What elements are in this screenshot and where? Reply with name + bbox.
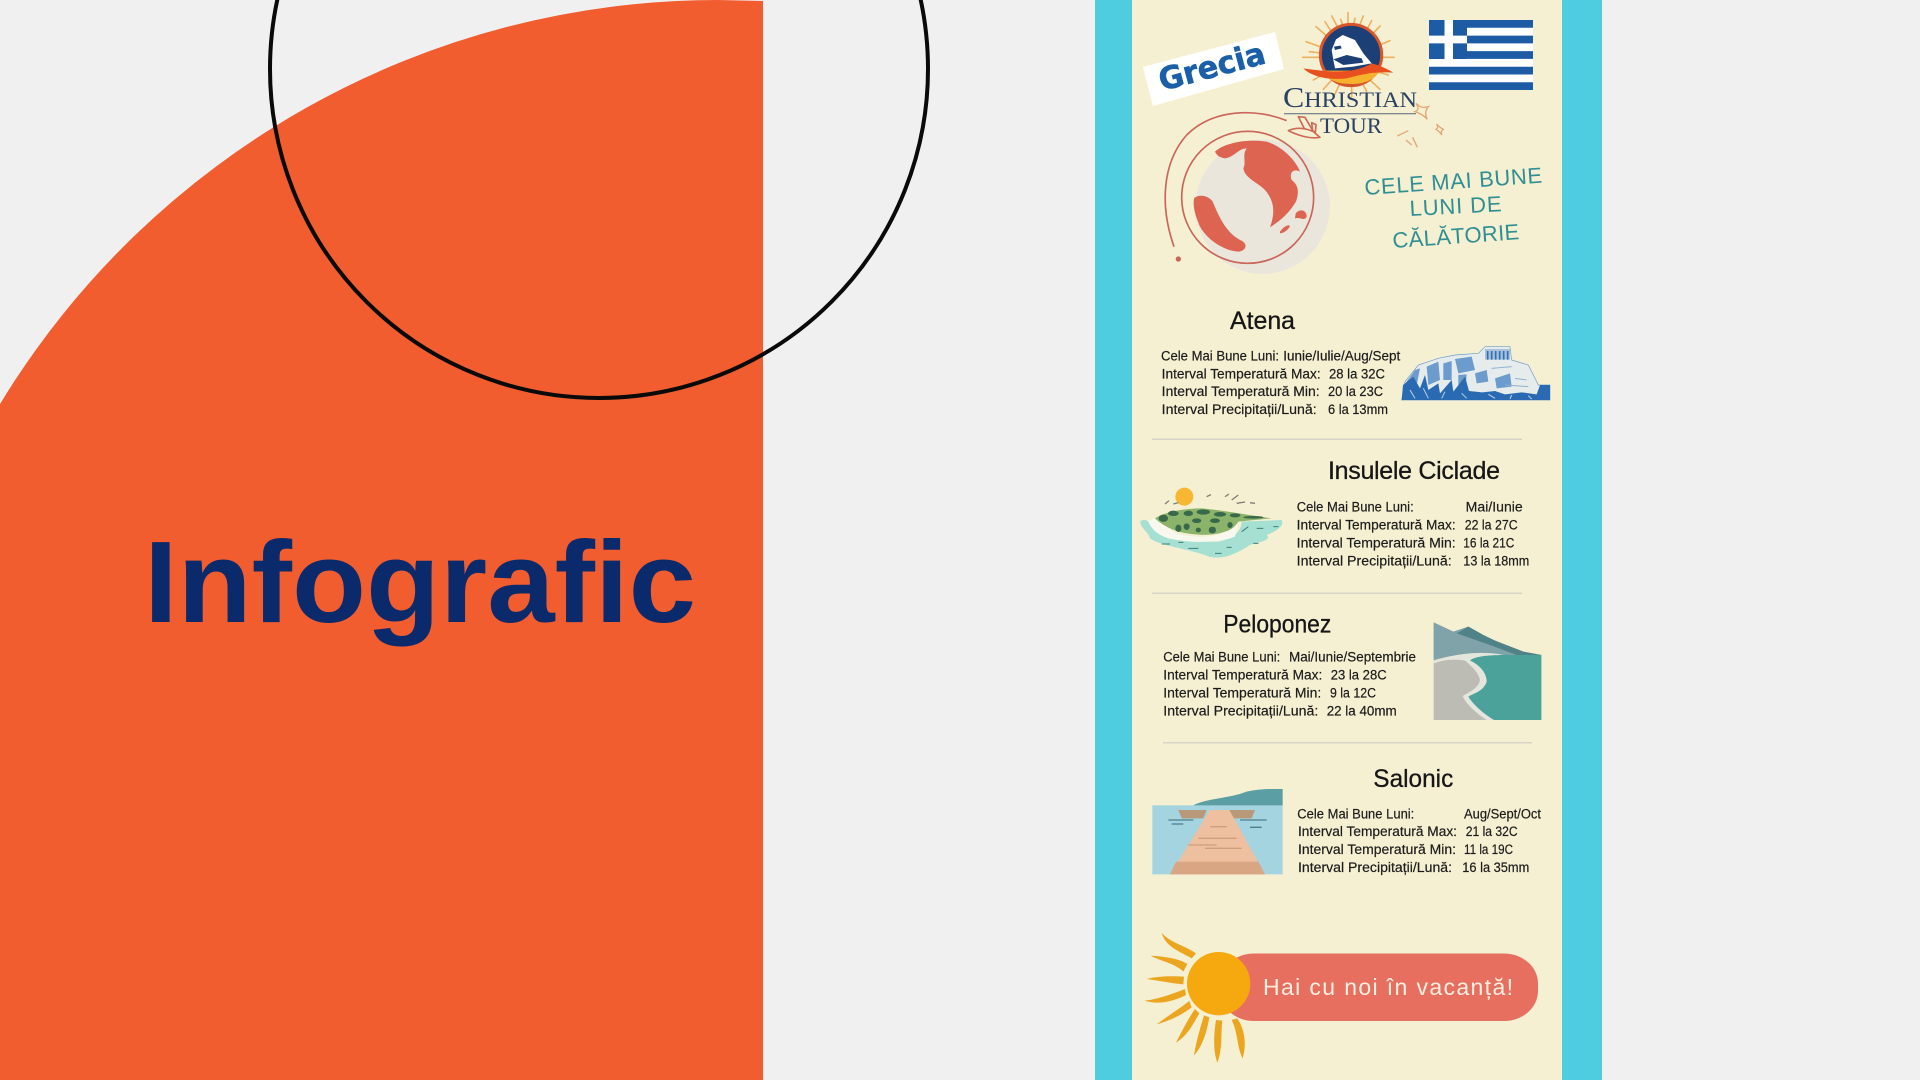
illustration: island [1140,488,1282,558]
section: Insulele Ciclade [1140,457,1529,568]
Ciclade data: Interval Temperatură Max: [1297,517,1456,532]
section: Atena [1161,307,1550,417]
black outline circle [270,0,928,398]
icon: plane [1288,117,1320,138]
heading: Salonic: Salonic [1373,765,1453,793]
Peloponez data: 9 la 12C [1330,685,1376,700]
Salonic data: Cele Mai Bune Luni: [1297,806,1414,821]
Ciclade data: 22 la 27C [1465,517,1518,532]
Atena data: 6 la 13mm [1328,402,1388,417]
icon: sparkles [1397,103,1443,147]
label: Grecia: Grecia [1155,36,1269,99]
Ciclade data [1297,500,1529,568]
divider [1163,742,1532,744]
heading: Peloponez: Peloponez [1223,611,1331,639]
Salonic data: 11 la 19C [1464,842,1513,857]
logo: Christian Tour: TOUR [1320,113,1382,138]
icon: Greek flag [1429,20,1533,90]
divider [1152,592,1522,594]
Peloponez data: Cele Mai Bune Luni: [1163,650,1280,665]
Salonic data: 21 la 32C [1466,824,1518,839]
poster cream sheet [1132,0,1562,1080]
Peloponez data: Interval Temperatură Max: [1163,667,1322,682]
Peloponez data: Interval Precipitații/Lună: [1163,703,1318,718]
illustration: Acropolis [1402,347,1550,400]
Peloponez data: Interval Temperatură Min: [1163,685,1321,700]
Atena data [1161,349,1401,417]
heading: best travel months [1364,163,1543,253]
heading: best travel months: LUNI DE [1409,191,1502,221]
Atena data: Interval Temperatură Min: [1162,384,1320,399]
Atena data: Cele Mai Bune Luni: [1161,349,1279,364]
Salonic data: Interval Temperatură Max: [1298,824,1457,839]
button text: Hai cu noi în vacanță! [1263,974,1513,1000]
button [1220,954,1538,1021]
Peloponez data: 23 la 28C [1331,667,1387,682]
Ciclade data: Interval Precipitații/Lună: [1297,553,1452,568]
Atena data: Interval Precipitații/Lună: [1162,402,1317,417]
title: Infografic [144,517,696,647]
Ciclade data: Interval Temperatură Min: [1297,535,1456,550]
section: Peloponez [1163,611,1541,720]
Atena data: 28 la 32C [1329,366,1385,381]
Salonic data: 16 la 35mm [1462,860,1529,875]
Ciclade data: 16 la 21C [1463,535,1515,550]
call to action [1144,933,1538,1063]
Ciclade data: Mai/Iunie [1466,500,1523,515]
logo: Christian Tour: CHRISTIAN [1283,82,1417,114]
heading: Atena: Atena [1230,307,1295,335]
logo: Christian Tour [1283,13,1417,138]
Peloponez data: 22 la 40mm [1327,703,1397,718]
heading: best travel months: CĂLĂTORIE [1392,219,1520,253]
panel: infographic poster [1095,0,1602,1080]
poster cyan background [1095,0,1602,1080]
illustration: pier [1152,789,1283,874]
section: Salonic [1152,765,1541,875]
Atena data: 20 la 23C [1328,384,1383,399]
Atena data: Interval Temperatură Max: [1162,366,1321,381]
icon: globe with plane orbit [1165,113,1330,274]
Salonic data: Aug/Sept/Oct [1464,806,1541,821]
heading: Insulele Ciclade: Insulele Ciclade [1328,457,1500,485]
Salonic data [1297,806,1541,875]
Atena data: Iunie/Iulie/Aug/Sept [1283,349,1401,364]
Salonic data: Interval Precipitații/Lună: [1298,860,1452,875]
Peloponez data [1163,650,1416,718]
Ciclade data: 13 la 18mm [1463,553,1529,568]
illustration: beach [1434,622,1541,720]
orange quarter-circle shape [0,0,763,1080]
heading: best travel months: CELE MAI BUNE [1364,163,1543,200]
icon: sun [1144,933,1250,1063]
divider [1152,438,1522,440]
Salonic data: Interval Temperatură Min: [1298,842,1456,857]
Peloponez data: Mai/Iunie/Septembrie [1289,650,1416,665]
Ciclade data: Cele Mai Bune Luni: [1297,500,1414,515]
